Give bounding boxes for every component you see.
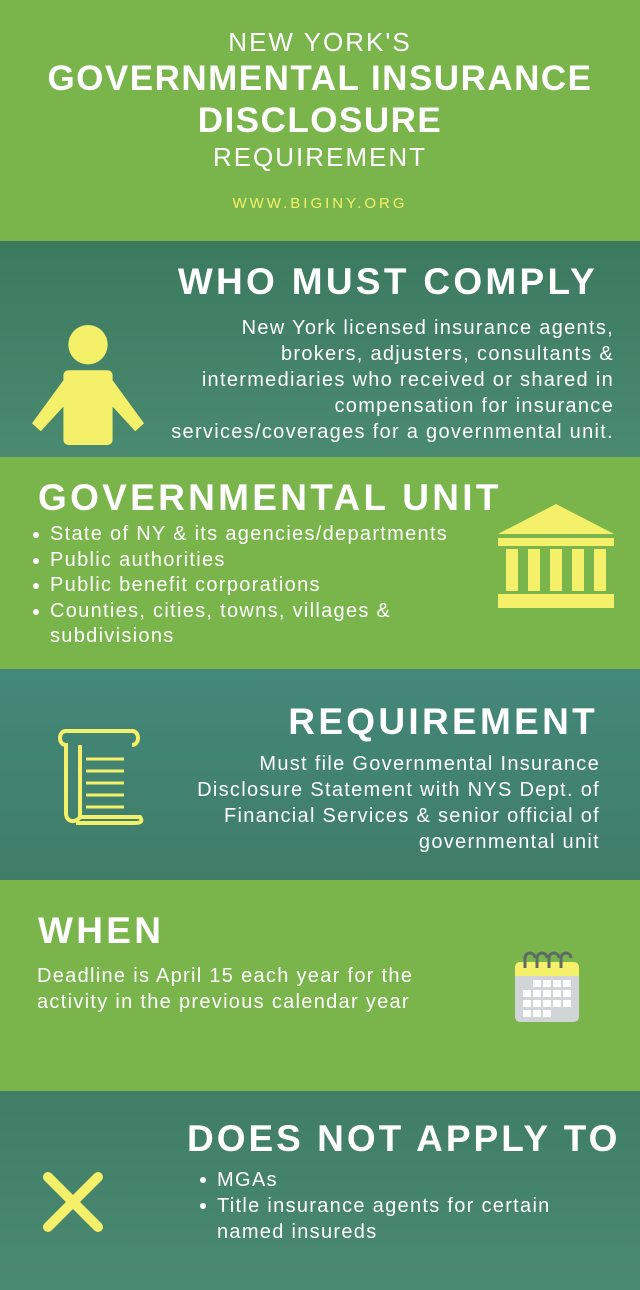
list: MGAs: [217, 1169, 278, 1191]
title: DISCLOSURE: [198, 101, 442, 140]
text block: Financial Services & senior official of: [224, 805, 600, 827]
list: subdivisions: [50, 625, 175, 647]
text block: Must file Governmental Insurance: [259, 753, 600, 775]
heading: GOVERNMENTAL UNIT: [38, 477, 502, 518]
text block: intermediaries who received or shared in: [202, 369, 614, 391]
header panel: [0, 0, 640, 241]
text block: New York licensed insurance agents,: [242, 317, 614, 339]
title: [47, 27, 593, 172]
icon: building: [498, 504, 614, 608]
icon: person: [32, 325, 144, 445]
list: [33, 523, 448, 647]
panel: governmental unit: [0, 457, 640, 669]
text block: [37, 965, 413, 1013]
text block: Deadline is April 15 each year for the: [37, 965, 413, 987]
text block: compensation for insurance: [334, 395, 614, 417]
list: Title insurance agents for certain: [217, 1195, 551, 1217]
title: REQUIREMENT: [213, 142, 427, 172]
heading: WHO MUST COMPLY: [178, 261, 598, 302]
panel: when: [0, 880, 640, 1091]
panel: does not apply to: [0, 1091, 640, 1290]
title: GOVERNMENTAL INSURANCE: [47, 59, 593, 98]
list: Counties, cities, towns, villages &: [50, 600, 391, 622]
icon: calendar: [515, 952, 579, 1022]
list: Public benefit corporations: [50, 574, 321, 596]
title: NEW YORK'S: [228, 27, 412, 57]
url: WWW.BIGINY.ORG: [232, 195, 408, 212]
heading: WHEN: [38, 910, 164, 951]
text block: Disclosure Statement with NYS Dept. of: [197, 779, 600, 801]
text block: services/coverages for a governmental unit.: [171, 421, 614, 443]
heading: DOES NOT APPLY TO: [187, 1118, 620, 1159]
text block: [171, 317, 614, 443]
text block: activity in the previous calendar year: [37, 991, 410, 1013]
text block: governmental unit: [419, 831, 600, 853]
list: [200, 1169, 551, 1243]
panel: requirement: [0, 669, 640, 880]
list: Public authorities: [50, 548, 226, 570]
heading: REQUIREMENT: [288, 701, 598, 742]
icon: scroll: [58, 729, 144, 825]
icon: x mark: [43, 1172, 103, 1232]
list: State of NY & its agencies/departments: [50, 523, 448, 545]
text block: brokers, adjusters, consultants &: [281, 343, 614, 365]
text block: [197, 753, 600, 853]
list: named insureds: [217, 1221, 378, 1243]
panel: who must comply: [0, 241, 640, 457]
